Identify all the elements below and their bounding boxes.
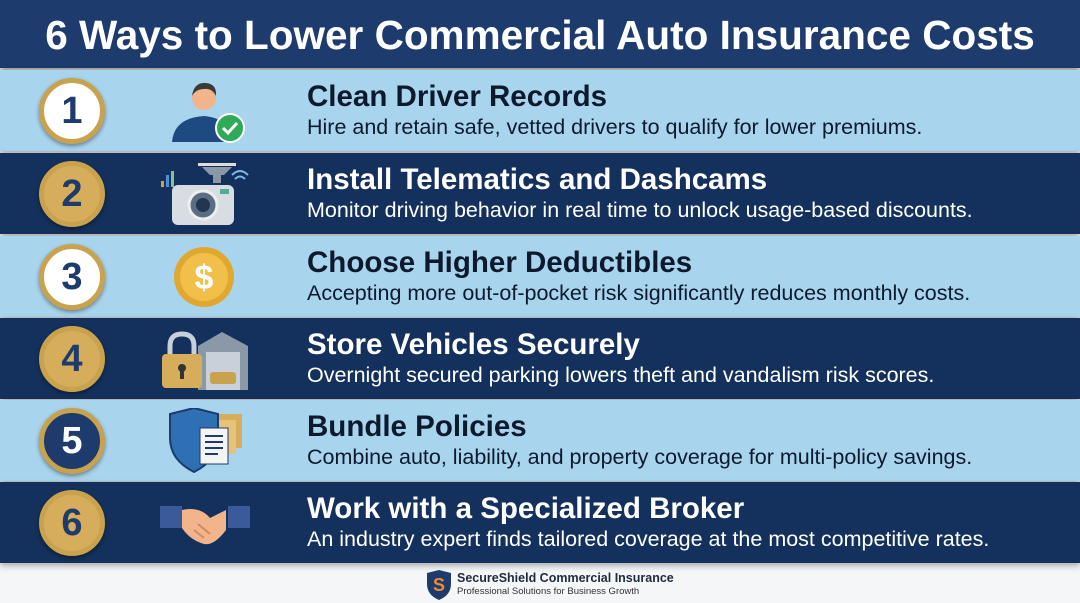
brand name: SecureShield Commercial Insurance — [457, 571, 674, 585]
desc 4: Overnight secured parking lowers theft and vandalism risk scores. — [307, 363, 934, 387]
footer logo — [427, 570, 674, 600]
desc 6: An industry expert finds tailored coverage at the most competitive rates. — [307, 527, 989, 551]
icon: dollar coin: $ — [195, 259, 214, 297]
title — [0, 0, 1080, 68]
heading 4: Store Vehicles Securely — [307, 328, 640, 361]
desc 2: Monitor driving behavior in real time to unlock usage-based discounts. — [307, 198, 973, 222]
badge 1: 1 — [61, 90, 83, 132]
icon: shield with documents — [169, 408, 242, 474]
tagline: Professional Solutions for Business Growth — [457, 586, 639, 597]
row 3 — [0, 236, 1080, 317]
title: 6 Ways to Lower Commercial Auto Insurance Costs — [45, 12, 1035, 58]
icon: lock and garage — [162, 332, 248, 390]
badge 3 — [39, 244, 105, 310]
badge 2 — [39, 161, 105, 227]
badge 1 — [39, 78, 105, 144]
badge 6 — [39, 490, 105, 556]
row 6 — [0, 482, 1080, 563]
icon: driver with check — [172, 82, 245, 143]
badge 6: 6 — [61, 502, 83, 544]
badge 4 — [39, 326, 105, 392]
desc 5: Combine auto, liability, and property coverage for multi-policy savings. — [307, 445, 972, 469]
icon: handshake — [160, 506, 250, 544]
heading 1: Clean Driver Records — [307, 80, 607, 113]
row 1 — [0, 70, 1080, 151]
row 4 — [0, 318, 1080, 399]
heading 5: Bundle Policies — [307, 410, 527, 443]
heading 3: Choose Higher Deductibles — [307, 246, 692, 279]
badge 3: 3 — [61, 256, 83, 298]
badge 5: 5 — [61, 420, 83, 462]
heading 2: Install Telematics and Dashcams — [307, 163, 767, 196]
badge 4: 4 — [61, 338, 83, 380]
icon: shield logo: S — [433, 575, 445, 595]
badge 5 — [39, 408, 105, 474]
icon: shield logo — [427, 570, 451, 600]
icon: dashcam — [161, 163, 249, 225]
desc 1: Hire and retain safe, vetted drivers to qualify for lower premiums. — [307, 115, 922, 139]
badge 2: 2 — [61, 173, 83, 215]
icon: dollar coin — [174, 247, 234, 307]
row 2 — [0, 153, 1080, 234]
desc 3: Accepting more out-of-pocket risk significantly reduces monthly costs. — [307, 281, 970, 305]
row 5 — [0, 400, 1080, 481]
heading 6: Work with a Specialized Broker — [307, 492, 744, 525]
